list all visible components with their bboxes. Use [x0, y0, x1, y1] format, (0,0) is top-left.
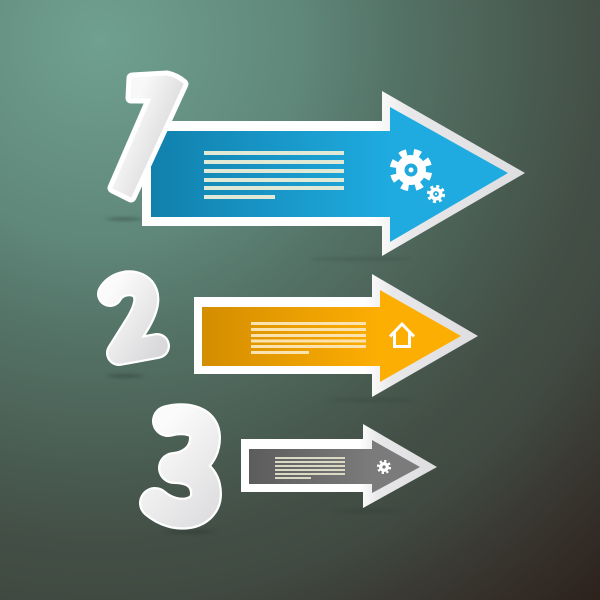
icon: large gear [391, 150, 431, 190]
arrow 3 white outline [241, 424, 437, 508]
arrow 2 text lines [251, 322, 366, 354]
icon: house [390, 324, 414, 346]
arrow 3: grey [241, 424, 437, 508]
arrow 2: orange [194, 274, 478, 397]
shadows beneath arrows [310, 258, 412, 512]
arrow 1 blue fill [151, 107, 508, 242]
arrow 2 white outline [194, 274, 478, 397]
icon: grey arrow gear [378, 461, 390, 473]
number 2 [110, 283, 157, 353]
shadows beneath numbers [106, 218, 214, 534]
arrow 1 text lines [204, 151, 344, 199]
arrow 3 text lines [275, 457, 345, 479]
icon: small gear [428, 186, 444, 202]
arrow 2 orange fill [202, 290, 461, 382]
arrow 1: blue [142, 91, 525, 256]
number 3 [155, 419, 206, 514]
arrow 1 white outline [142, 91, 525, 256]
arrow 3 grey fill [249, 440, 420, 493]
number 1 [113, 76, 183, 197]
